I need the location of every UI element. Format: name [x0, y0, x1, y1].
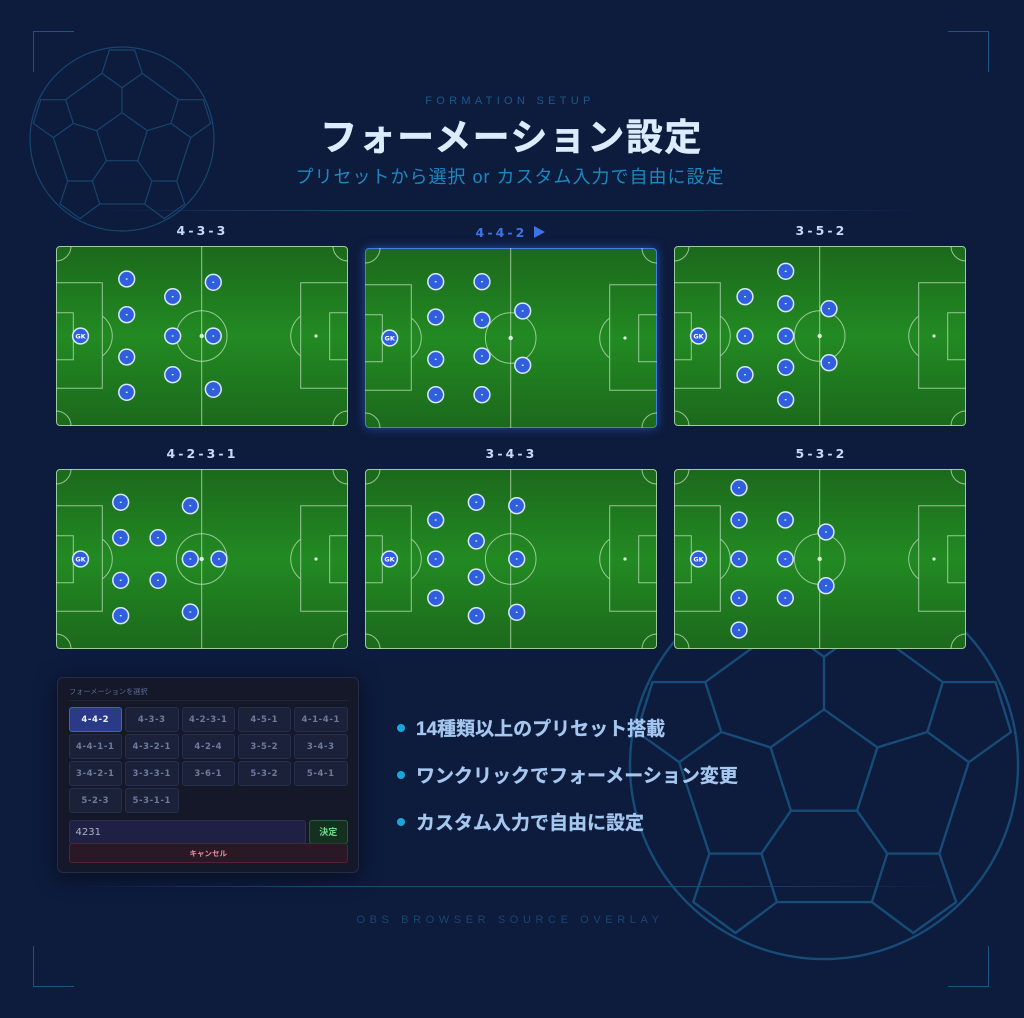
players: GK: [385, 334, 396, 342]
players: GK: [75, 555, 87, 563]
players: [73, 271, 221, 400]
players: GK: [693, 332, 705, 340]
label: 4-3-3: 4-3-3: [177, 223, 228, 238]
bullet dot: [397, 818, 405, 826]
preset: 5-3-1-1: [133, 796, 171, 806]
preset: 4-3-2-1: [133, 742, 171, 752]
preset: [125, 761, 178, 786]
label: 3-4-3: 3-4-3: [486, 446, 537, 461]
preset: [68, 734, 122, 758]
feature text: 14種類以上のプリセット搭載: [416, 719, 665, 740]
preset: 4-2-4: [194, 742, 222, 752]
custom input: 4231: [76, 826, 101, 838]
footer divider: [70, 886, 950, 887]
preset: 4-5-1: [250, 715, 278, 725]
eyebrow heading: FORMATION SETUP: [425, 95, 595, 107]
confirm button: 決定: [319, 826, 337, 836]
preset: [182, 734, 235, 758]
subtitle: プリセットから選択 or カスタム入力で自由に設定: [295, 167, 724, 187]
preset: 3-3-3-1: [133, 769, 171, 779]
cancel button: キャンセル: [190, 849, 227, 858]
panel: formation selector: [57, 677, 359, 873]
preset: 5-3-2: [250, 769, 278, 779]
preset: 4-4-1-1: [76, 742, 114, 752]
corner bracket: top right: [948, 31, 989, 72]
players: [691, 263, 837, 408]
corner bracket: bottom right: [948, 946, 989, 987]
pitch: 3-5-2: [674, 246, 966, 426]
preset: 3-6-1: [194, 769, 222, 779]
label: 4-4-2 selected: 4-4-2: [476, 225, 527, 240]
pitch: 3-4-3: [365, 469, 657, 649]
preset: 3-4-3: [307, 742, 335, 752]
pitch: 4-3-3: [56, 246, 348, 426]
preset: [125, 788, 178, 812]
preset: 4-1-4-1: [302, 715, 340, 725]
bullet dot: [397, 724, 405, 732]
preset: [238, 707, 291, 732]
panel heading: フォーメーションを選択: [69, 687, 148, 696]
players: GK: [75, 332, 87, 340]
pitch: 4-4-2 selected: [365, 248, 657, 428]
preset: 3-4-2-1: [76, 769, 114, 779]
selected preset: [68, 707, 122, 732]
preset: [68, 788, 122, 812]
preset: [294, 707, 348, 732]
corner bracket: top left: [33, 31, 74, 72]
preset buttons: [69, 707, 348, 813]
ball: top left: [30, 47, 214, 231]
players: GK: [384, 555, 396, 563]
preset: [238, 761, 291, 786]
preset: 4-3-3: [138, 715, 166, 725]
players: GK: [693, 555, 705, 563]
preset: [238, 734, 291, 758]
preset: 4-2-3-1: [189, 715, 227, 725]
players: [73, 494, 227, 624]
preset: [294, 761, 348, 786]
footer text: OBS BROWSER SOURCE OVERLAY: [356, 914, 664, 926]
pitch: 4-2-3-1: [56, 469, 348, 649]
panel divider: [69, 700, 348, 701]
preset: [125, 707, 178, 732]
corner bracket: bottom left: [33, 946, 74, 987]
players: [382, 494, 525, 624]
players: [691, 480, 834, 638]
selected preset: 4-4-2: [81, 715, 109, 725]
custom input: [68, 820, 306, 844]
feature text: カスタム入力で自由に設定: [416, 813, 644, 834]
label: 4-2-3-1: 4-2-3-1: [166, 446, 239, 461]
preset: 5-2-3: [81, 796, 109, 806]
pitch: 5-3-2: [674, 469, 966, 649]
preset: 5-4-1: [307, 769, 335, 779]
preset: [125, 734, 178, 758]
label: 5-3-2: 5-3-2: [796, 446, 847, 461]
icon: selection arrow: [534, 226, 545, 238]
players: [382, 274, 531, 403]
cancel button: [68, 843, 348, 863]
preset: [182, 761, 235, 786]
header divider: [100, 210, 924, 211]
feature text: ワンクリックでフォーメーション変更: [416, 766, 738, 787]
confirm button: [308, 820, 348, 844]
bullet dot: [397, 771, 405, 779]
preset: [68, 761, 122, 786]
preset: 3-5-2: [250, 742, 278, 752]
ball: bottom right: [630, 571, 1018, 959]
preset: [182, 707, 235, 732]
preset: [294, 734, 348, 758]
label: 3-5-2: 3-5-2: [796, 223, 847, 238]
title: フォーメーション設定: [320, 117, 703, 158]
